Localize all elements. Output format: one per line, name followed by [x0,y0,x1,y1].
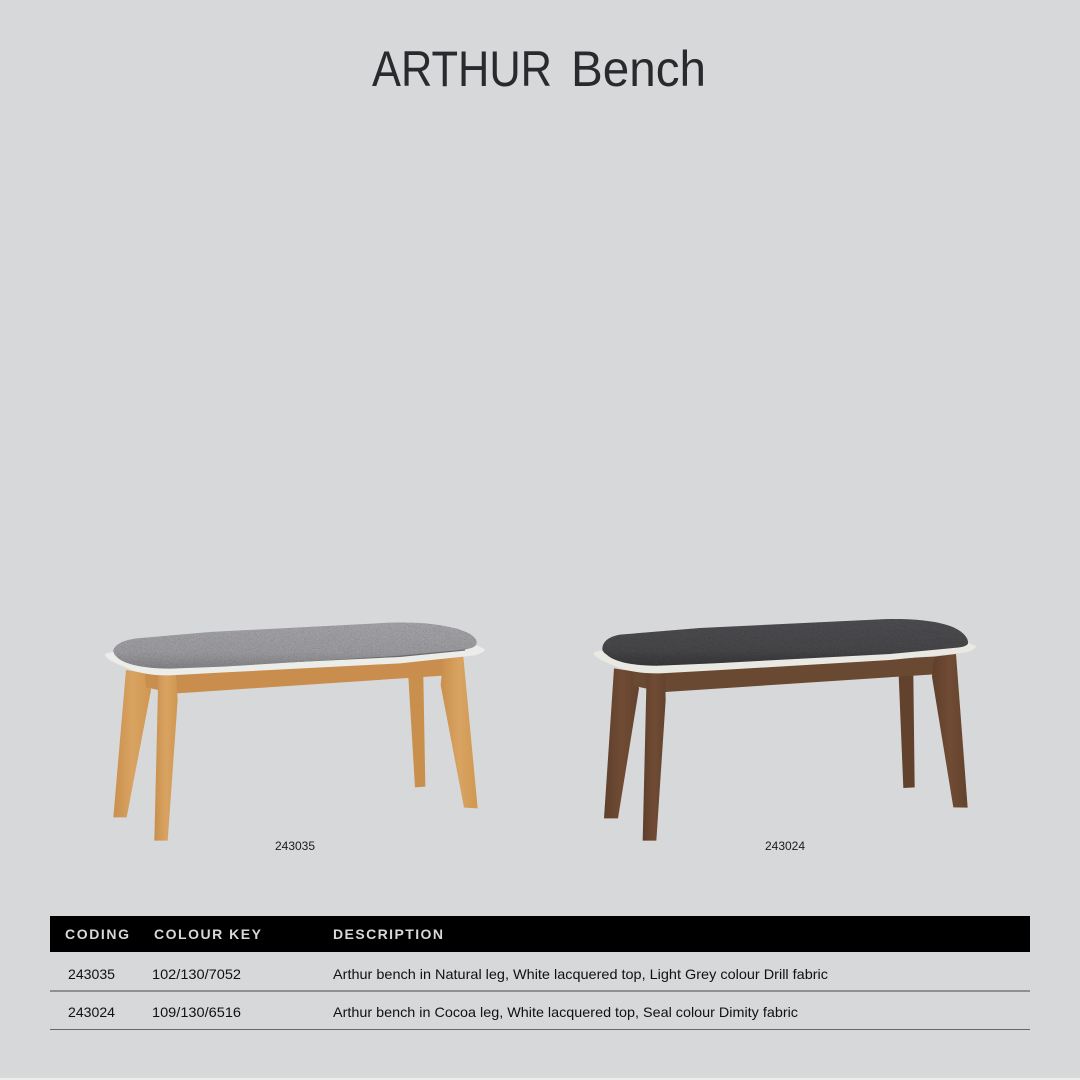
table row: 243024: 109/130/6516 [152,1004,241,1020]
rear right leg [899,674,915,788]
front centre leg [154,674,178,841]
light grey cushion [113,622,477,669]
table header [50,916,1030,952]
seat rail [633,657,934,692]
table header: DESCRIPTION [333,926,443,942]
table row: 243024: 243024 [68,1004,115,1020]
right leg [932,654,968,808]
title [372,41,706,97]
right leg [441,657,478,808]
product: cocoa leg bench [593,619,976,841]
title: ARTHUR [372,41,552,97]
rear right leg [408,676,425,787]
seal cushion [602,619,968,666]
seat rail [145,658,443,693]
front centre leg [643,673,666,841]
white lacquered top [105,643,485,675]
title: Bench [571,41,706,97]
product: natural leg bench [105,622,485,841]
table row: 243035: 243035 [68,966,115,982]
table row: 243024 [50,1004,1030,1030]
table row: 243035: 102/130/7052 [152,966,241,982]
table row: 243024: Arthur bench in Cocoa leg, White lacquered top, Seal colour Dimity fabric [333,1004,798,1020]
table [50,916,1030,1030]
left leg [604,668,639,818]
table row: 243035: Arthur bench in Natural leg, White lacquered top, Light Grey colour Drill fabric [333,966,828,982]
table header: CODING [65,926,129,942]
product code: 243035: 243035 [275,839,315,853]
left leg [113,670,151,817]
cushion shadow line [257,649,465,664]
table row: 243035 [50,966,1030,992]
product code: 243024: 243024 [765,839,805,853]
table header: COLOUR KEY [154,926,262,942]
white lacquered top [593,641,976,673]
